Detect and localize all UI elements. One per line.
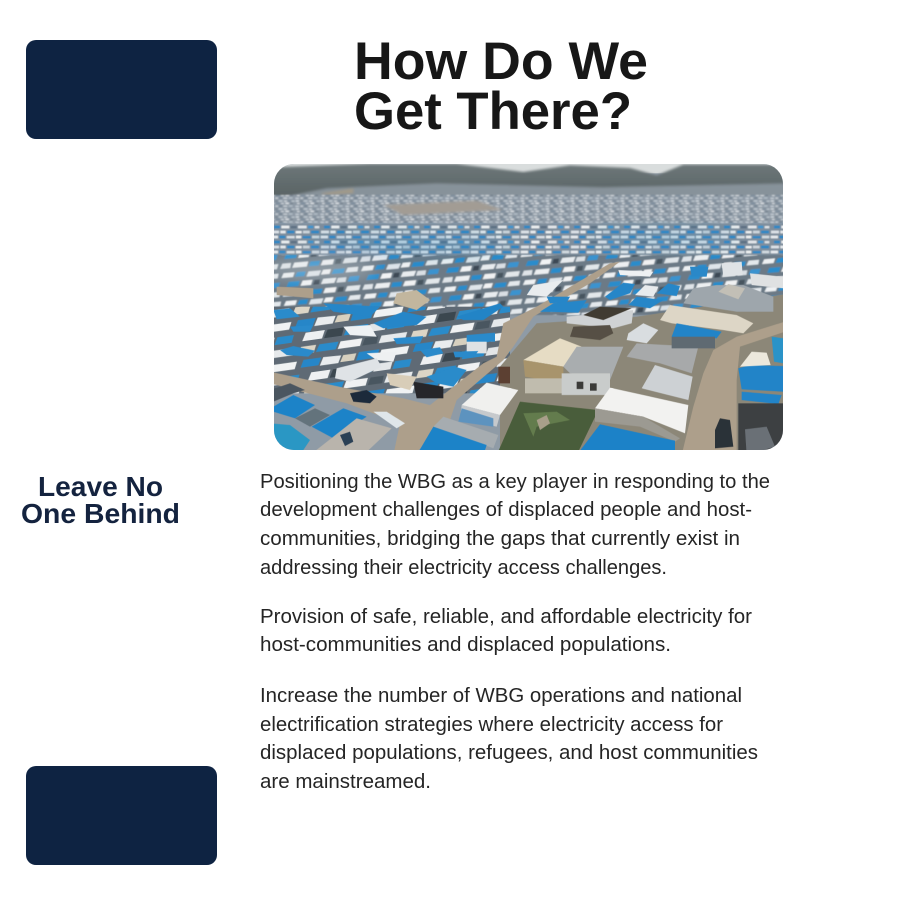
photo: aerial view of refugee camp <box>263 160 790 455</box>
text block: increase WBG operations: Increase the number of WBG operations and national <box>260 685 742 707</box>
text block: safe reliable electricity: Provision of safe, reliable, and affordable electricity for <box>260 606 752 628</box>
ground right of road <box>500 293 790 455</box>
subheading: Leave No One Behind <box>21 471 180 529</box>
centre bottom buildings <box>497 402 598 455</box>
blue and white tone patches <box>263 231 737 280</box>
text block: positioning the WBG <box>260 471 770 579</box>
text block: increase WBG operations: are mainstreamed. <box>260 771 431 793</box>
text block: increase WBG operations <box>260 685 758 793</box>
text block: increase WBG operations: electrification strategies where electricity access for <box>260 714 723 736</box>
left near tents <box>273 308 300 319</box>
text block: increase WBG operations: displaced populations, refugees, and host communities <box>260 742 758 764</box>
title: Get There? <box>354 82 632 141</box>
right blue tents <box>738 365 783 392</box>
subheading: Leave No One Behind: One Behind <box>21 498 180 529</box>
panel: bottom navy block <box>26 766 217 865</box>
text block: positioning the WBG: Positioning the WBG as a key player in responding to the <box>260 471 770 493</box>
text block: positioning the WBG: development challenges of displaced people and host- <box>260 499 752 521</box>
text block: safe reliable electricity: host-communities and displaced populations. <box>260 634 671 656</box>
panel: top navy block <box>26 40 217 139</box>
right grey and white roofs <box>627 343 698 373</box>
mid right tents <box>540 300 587 313</box>
road network <box>270 262 790 455</box>
title: How Do We <box>354 32 648 91</box>
centre beige building <box>523 338 582 367</box>
subheading: Leave No One Behind: Leave No <box>38 471 163 502</box>
text block: positioning the WBG: addressing their electricity access challenges. <box>260 557 667 579</box>
text block: positioning the WBG: communities, bridging the gaps that currently exist in <box>260 528 740 550</box>
text block: safe reliable electricity <box>260 606 752 656</box>
title <box>354 32 648 141</box>
